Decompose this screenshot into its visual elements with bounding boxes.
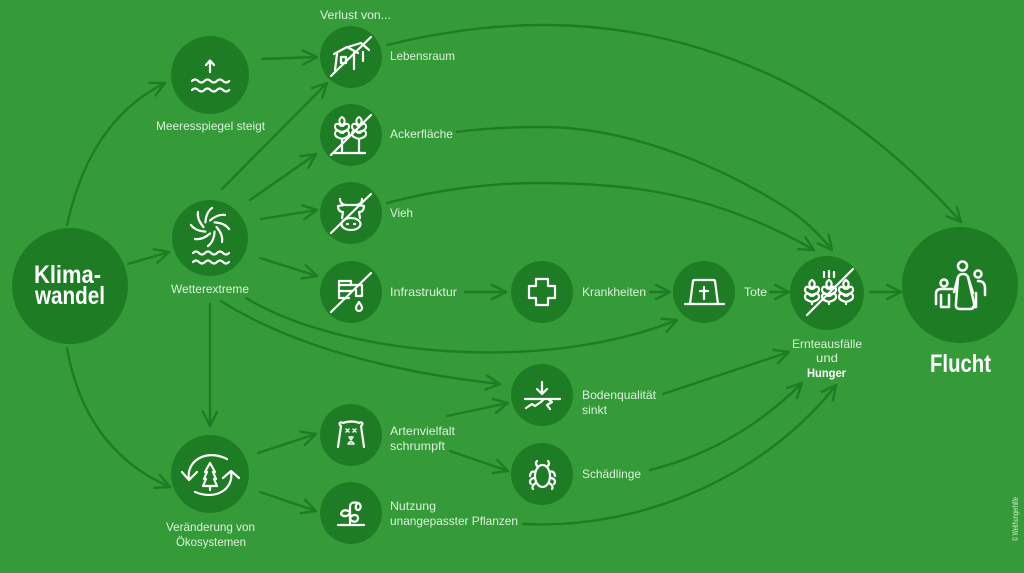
credit: © Welthungerhilfe — [1010, 497, 1020, 541]
icon: bear with crossed eyes — [338, 422, 364, 447]
arrow: Lebensraum to Flucht — [387, 25, 961, 222]
node: Wetterextreme — [171, 200, 249, 296]
label: Ökosystemen — [176, 535, 246, 549]
arrow: Klimawandel to Wetterextreme — [128, 252, 169, 264]
label: Tote — [744, 285, 767, 299]
icon: tree in cycle — [182, 455, 239, 495]
arrow: Klimawandel to Ökosysteme — [67, 348, 170, 487]
label: Krankheiten — [582, 285, 646, 299]
icon: crossed-out crops — [805, 269, 853, 315]
node: Artenvielfalt schrumpft — [320, 404, 456, 466]
heading: Klima-wandel: wandel — [34, 282, 105, 310]
node: Lebensraum — [320, 8, 455, 88]
label: schrumpft — [390, 439, 446, 453]
label: Infrastruktur — [390, 285, 457, 299]
label: Nutzung — [390, 499, 436, 513]
label: Bodenqualität — [582, 388, 657, 402]
icon: beetle — [530, 461, 555, 489]
arrow: Wetterextreme to Lebensraum — [222, 83, 327, 189]
label: Veränderung von — [166, 520, 255, 534]
node: Nutzung unangepasster Pflanzen — [320, 482, 518, 544]
arrow: Wetterextreme to Bodenqualität — [221, 301, 500, 384]
label: sinkt — [582, 403, 608, 417]
arrow: Infrastruktur to Krankheiten — [465, 291, 506, 293]
heading: Klima-wandel: Klima- — [34, 261, 101, 289]
arrow: Vieh to Ernteausfälle — [387, 183, 814, 250]
node: Ernteausfälle und Hunger — [790, 256, 864, 380]
arrow: Ökosysteme to Nutzung — [260, 492, 316, 511]
node: Bodenqualität sinkt — [511, 364, 657, 426]
arrow: Ökosysteme to Artenvielfalt — [258, 434, 316, 453]
icon: refugee family — [936, 262, 985, 309]
node: Vieh — [320, 182, 413, 244]
label: und — [816, 351, 838, 365]
arrow: Wetterextreme to Tote — [246, 298, 677, 352]
icon: gravestone — [685, 280, 724, 304]
arrow: Ackerfläche to Ernteausfälle — [457, 127, 832, 250]
node: Schädlinge — [511, 443, 641, 505]
arrow: Wetterextreme to Infrastruktur — [260, 258, 317, 276]
icon: cyclone and waves — [191, 208, 229, 264]
label: Vieh — [390, 206, 413, 220]
node: Tote — [673, 261, 767, 323]
icon: rising water — [192, 60, 229, 92]
arrow: Wetterextreme to Vieh — [261, 210, 317, 219]
icon: crossed-out cow — [331, 194, 371, 233]
icon: crossed-out tap — [331, 273, 371, 312]
icon: crossed-out house — [331, 37, 371, 76]
label: Schädlinge — [582, 467, 641, 481]
arrow: Nutzung to Ernteausfälle — [523, 385, 836, 524]
arrow: Artenvielfalt to Schädlinge — [450, 451, 508, 471]
node: Veränderung von Ökosystemen — [166, 435, 255, 549]
icon: crossed-out field — [331, 115, 371, 155]
node: Meeresspiegel steigt — [156, 36, 266, 133]
label: Artenvielfalt — [390, 424, 456, 438]
arrow: Artenvielfalt to Bodenqualität — [447, 403, 508, 416]
node: Klimawandel — [12, 228, 128, 344]
label: Verlust von... — [320, 8, 391, 22]
icon: medical cross — [529, 279, 555, 305]
arrow: Ernteausfälle to Flucht — [870, 291, 901, 293]
label: Ernteausfälle — [792, 337, 862, 351]
label: Wetterextreme — [171, 282, 249, 296]
node: Infrastruktur — [320, 261, 457, 323]
node: Flucht — [902, 227, 1018, 378]
icon: cracked soil — [525, 382, 560, 409]
label: Lebensraum — [390, 49, 455, 63]
arrow: Wetterextreme to Ackerfläche — [250, 154, 316, 200]
label: Meeresspiegel steigt — [156, 119, 266, 133]
label: unangepasster Pflanzen — [390, 514, 518, 528]
icon: wilting plant — [338, 502, 364, 525]
heading: Flucht — [930, 350, 992, 378]
arrow: Krankheiten to Tote — [650, 291, 670, 293]
node: Krankheiten — [511, 261, 646, 323]
arrows — [67, 25, 961, 524]
arrow: Schädlinge to Ernteausfälle — [650, 383, 802, 470]
arrow: Klimawandel to Meeresspiegel — [67, 83, 165, 225]
arrow: Wetterextreme to Ökosysteme — [209, 304, 211, 426]
label: Hunger: Hunger — [807, 366, 846, 380]
arrow: Meeresspiegel to Lebensraum — [262, 57, 317, 59]
node: Ackerfläche — [320, 104, 453, 166]
label: Ackerfläche — [390, 127, 453, 141]
arrow: Tote to Ernteausfälle — [770, 291, 789, 293]
arrow: Bodenqualität to Ernteausfälle — [663, 352, 789, 394]
